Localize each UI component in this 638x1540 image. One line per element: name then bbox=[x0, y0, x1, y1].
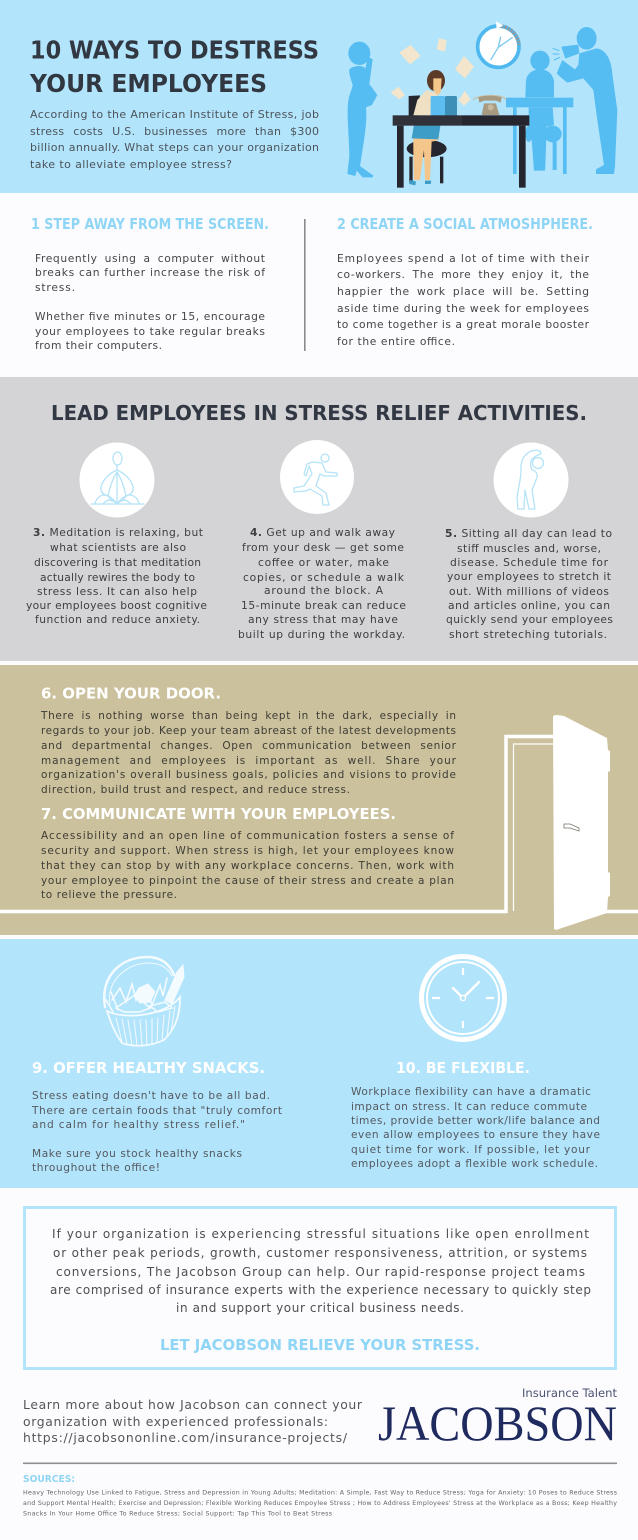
text: tip 2: Employees spend a lot of time with their bbox=[337, 252, 590, 265]
panel: tips 1 and 2 bbox=[31, 215, 593, 352]
text: tip 6: direction, build trust and respect, and reduce stress. bbox=[41, 784, 350, 796]
text: tip 6: organization's overall business goals, policies and visions to provide bbox=[41, 769, 456, 781]
text: tip 1: breaks can further increase the risk of bbox=[35, 266, 265, 279]
text: tip 1: Whether five minutes or 15, encourage bbox=[35, 310, 265, 323]
text: tip 1: your employees to take regular breaks bbox=[35, 325, 265, 338]
heading: tip 6: 6. OPEN YOUR DOOR. bbox=[41, 684, 221, 702]
laptop bbox=[431, 96, 457, 117]
icon: meditation bbox=[80, 442, 154, 518]
text: activity 3: your employees boost cognitive bbox=[26, 599, 207, 612]
chair and seated worker bbox=[407, 70, 447, 185]
footer: learn more text bbox=[23, 1397, 363, 1445]
text: tip 7: that they can stop by with any workplace concerns. Then, work with bbox=[41, 860, 454, 872]
text: tip 2 bbox=[337, 252, 590, 348]
text: tip 2: to come together is a great morale booster bbox=[337, 318, 590, 331]
callout heading: LET JACOBSON RELIEVE YOUR STRESS. bbox=[160, 1336, 480, 1354]
sources: SOURCES: bbox=[23, 1474, 75, 1485]
text: activity 5 bbox=[445, 527, 613, 641]
intro text: take to alleviate employee stress? bbox=[30, 158, 232, 171]
icon: stretching person bbox=[494, 442, 568, 518]
illustration: stressed office bbox=[347, 21, 617, 188]
text: tip 9: Stress eating doesn't have to be all bad. bbox=[32, 1090, 270, 1102]
text: activity 4: around the block. A bbox=[264, 584, 384, 597]
flying papers bbox=[391, 38, 474, 106]
ringing phone bbox=[473, 96, 506, 115]
panel: header bbox=[0, 0, 638, 193]
text: activity 4: coffee or water, make bbox=[258, 556, 389, 569]
text: tip 2: co-workers. The more they enjoy it, the bbox=[337, 268, 589, 281]
intro text: According to the American Institute of Stress, job bbox=[30, 108, 319, 121]
text: activity 4: built up during the workday. bbox=[238, 628, 405, 641]
text: tip 7: to relieve the pressure. bbox=[41, 889, 177, 901]
title bbox=[29, 36, 319, 98]
text: tip 10: even allow employees to ensure they have bbox=[351, 1129, 600, 1141]
text: activity 3: function and reduce anxiety. bbox=[35, 613, 200, 626]
callout text bbox=[50, 1227, 591, 1315]
text: tip 7: your employee to pinpoint the cause of their stress and create a plan bbox=[41, 875, 454, 887]
text: tip 1: stress. bbox=[35, 281, 75, 294]
callout text: conversions, The Jacobson Group can help. Our rapid-response project teams bbox=[56, 1265, 585, 1279]
text: tip 1 bbox=[35, 252, 265, 352]
callout text: If your organization is experiencing stressful situations like open enrollment bbox=[52, 1227, 589, 1241]
text: activity 4: from your desk — get some bbox=[242, 541, 404, 554]
icon: runner bbox=[280, 440, 354, 514]
callout text: or other peak periods, growth, customer responsiveness, attrition, or systems bbox=[53, 1246, 587, 1260]
text: activity 5: disease. Schedule time for bbox=[450, 556, 609, 569]
black desk bbox=[393, 115, 529, 188]
text: activity 3 bbox=[26, 526, 207, 626]
text: tip 2: happier the work place will be. Setting bbox=[337, 285, 589, 298]
heading: tip 2: 2 CREATE A SOCIAL ATMOSHPHERE. bbox=[337, 215, 593, 233]
footer: learn more text: https://jacobsononline.com/insurance-projects/ bbox=[23, 1430, 348, 1445]
silhouette: standing woman bbox=[347, 42, 377, 177]
heading: LEAD EMPLOYEES IN STRESS RELIEF ACTIVITIES. bbox=[51, 401, 587, 425]
title: YOUR EMPLOYEES bbox=[29, 69, 267, 98]
text: activity 5: stiff muscles and, worse, bbox=[457, 542, 601, 555]
text: activity 3: stress less. It can also help bbox=[37, 585, 197, 598]
heading: tip 10: 10. BE FLEXIBLE. bbox=[396, 1059, 530, 1077]
footer: learn more text: organization with experienced professionals: bbox=[23, 1414, 328, 1429]
logo: jacobson: JACOBSON bbox=[378, 1395, 617, 1451]
text: activity 5: out. With millions of videos bbox=[449, 585, 609, 598]
blue desk and seated woman silhouette bbox=[506, 51, 573, 174]
text: tip 9: Make sure you stock healthy snacks bbox=[32, 1148, 242, 1160]
text: tip 9: throughout the office! bbox=[32, 1162, 160, 1174]
text: tip 7: Accessibility and an open line of communication fosters a sense of bbox=[41, 830, 454, 842]
clock bbox=[478, 21, 519, 67]
intro text: stress costs U.S. businesses more than $300 bbox=[30, 125, 319, 138]
text: activity 5: short streteching tutorials. bbox=[449, 628, 607, 641]
text: tip 7: security and support. When stress is high, let your employees know bbox=[41, 845, 454, 857]
icon: open door bbox=[0, 715, 638, 930]
text: activity 4: 15-minute break can reduce bbox=[241, 599, 406, 612]
text: tip 10 bbox=[351, 1086, 600, 1170]
text: tip 6: There is nothing worse than being kept in the dark, especially in bbox=[40, 710, 456, 722]
text: tip 9: and calm for healthy stress relief." bbox=[32, 1119, 245, 1131]
heading: tip 7: 7. COMMUNICATE WITH YOUR EMPLOYEES. bbox=[41, 805, 396, 823]
text: tip 6: regards to your job. Keep your team abreast of the latest developments bbox=[41, 725, 456, 737]
text: activity 3: actually rewires the body to bbox=[40, 571, 195, 584]
intro text bbox=[30, 108, 319, 171]
sources: Snacks In Your Home Office To Reduce Stress; Social Support: Tap This Tool to Beat Stress bbox=[23, 1510, 332, 1518]
text: activity 4: 4. Get up and walk away bbox=[250, 526, 395, 539]
callout text: in and support your critical business needs. bbox=[176, 1301, 464, 1315]
footer: learn more text: Learn more about how Jacobson can connect your bbox=[23, 1397, 363, 1412]
callout text: are comprised of insurance experts with the experience necessary to quickly step bbox=[50, 1283, 591, 1297]
text: tip 6: and departmental changes. Open communication between senior bbox=[41, 740, 457, 752]
text: tip 10: quiet time for work. If possible, let your bbox=[351, 1144, 591, 1156]
text: tip 10: employees adopt a flexible work schedule. bbox=[351, 1158, 598, 1170]
text: tip 10: times, provide better work/life balance and bbox=[351, 1115, 600, 1127]
title: 10 WAYS TO DESTRESS bbox=[30, 36, 319, 64]
text: activity 5: 5. Sitting all day can lead to bbox=[445, 527, 612, 540]
silhouette: man with megaphone bbox=[553, 27, 617, 174]
text: tip 1: from their computers. bbox=[35, 339, 162, 352]
text: tip 6 bbox=[40, 710, 457, 796]
sources: Heavy Technology Use Linked to Fatigue, Stress and Depression in Young Adults; Meditation: A Simple, Fast Way to Reduce Stress; Yoga for Anxiety: 10 Poses to Reduce Stress bbox=[23, 1490, 617, 1496]
text: activity 4 bbox=[238, 526, 406, 641]
text: activity 4: copies, or schedule a walk bbox=[243, 571, 405, 584]
panel: stress relief activities bbox=[0, 377, 638, 661]
heading: tip 1: 1 STEP AWAY FROM THE SCREEN. bbox=[31, 215, 269, 233]
text: activity 3: what scientists are also bbox=[50, 541, 186, 554]
sources bbox=[23, 1474, 617, 1518]
icon: snack basket bbox=[104, 957, 184, 1046]
text: activity 4: any stress that may have bbox=[248, 613, 398, 626]
text: tip 9 bbox=[31, 1090, 282, 1174]
icon: wall clock bbox=[422, 956, 504, 1040]
text: activity 5: quickly send your employees bbox=[446, 613, 613, 626]
text: tip 10: impact on stress. It can reduce commute bbox=[351, 1101, 587, 1113]
text: activity 3: 3. Meditation is relaxing, but bbox=[33, 526, 203, 539]
text: tip 9: There are certain foods that "truly comfort bbox=[31, 1105, 282, 1117]
text: tip 10: Workplace flexibility can have a dramatic bbox=[351, 1086, 591, 1098]
intro text: billion annually. What steps can your organization bbox=[30, 141, 319, 154]
text: activity 5: your employees to stretch it bbox=[447, 570, 611, 583]
text: tip 2: aside time during the week for employees bbox=[337, 302, 589, 315]
panel: open door and communication bbox=[0, 665, 638, 935]
text: tip 2: for the entire office. bbox=[337, 335, 455, 348]
panel: snacks and flexibility bbox=[0, 939, 638, 1188]
text: activity 3: discovering is that meditation bbox=[34, 556, 201, 569]
text: activity 5: and articles online, you can bbox=[448, 599, 610, 612]
logo: jacobson: Insurance Talent bbox=[522, 1386, 617, 1400]
callout: jacobson can help bbox=[24, 1208, 616, 1368]
sources: and Support Mental Health; Exercise and Depression; Flexible Working Reduces Empoylee Stress ; How to Address Employees' Stress at the Workplace as a Boss; Keep Healthy bbox=[23, 1500, 617, 1507]
text: tip 6: management and employees is important as well. Share your bbox=[41, 755, 457, 767]
heading: tip 9: 9. OFFER HEALTHY SNACKS. bbox=[32, 1059, 265, 1077]
text: tip 7 bbox=[41, 830, 454, 901]
text: tip 1: Frequently using a computer without bbox=[35, 252, 265, 265]
